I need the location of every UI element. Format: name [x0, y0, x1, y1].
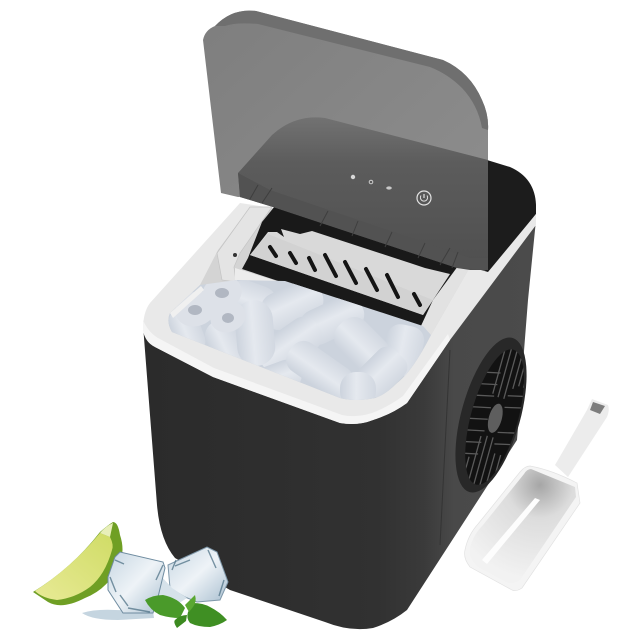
basil leaf top [185, 595, 196, 612]
basil leaves [145, 595, 227, 628]
power button [417, 191, 431, 205]
scoop handle [555, 399, 609, 477]
ice maker body [143, 160, 536, 629]
lime wedge [33, 522, 122, 605]
open lid [203, 11, 488, 270]
ring cubes [178, 280, 242, 330]
white top rim [143, 203, 536, 424]
lime rind [33, 522, 122, 605]
hinge bracket left [217, 207, 272, 282]
ice cube left [108, 552, 165, 613]
rim front highlight [143, 320, 450, 424]
basil leaf left [145, 595, 185, 618]
plate slotted face [250, 234, 433, 315]
small ledge right [385, 318, 431, 345]
bin well [168, 207, 470, 400]
panel lower band [238, 173, 488, 270]
ejector plate [250, 229, 450, 315]
bracket right [420, 266, 470, 335]
basil leaf bottom [174, 615, 187, 628]
bracket screw [233, 253, 237, 257]
lid top edge [215, 11, 488, 130]
ice bin interior [168, 206, 470, 400]
indicator icons [351, 175, 392, 190]
handle hole [590, 402, 605, 414]
lime pith [100, 523, 113, 537]
ice cube right [168, 547, 228, 602]
panel seam [440, 350, 450, 545]
scoop outer shell [465, 466, 580, 591]
tray corner lip [170, 286, 204, 318]
basil leaf right [187, 603, 227, 627]
ice cube facets [110, 550, 224, 612]
plate slots [270, 247, 420, 305]
ice bullets [168, 280, 431, 400]
fan vent [456, 338, 527, 492]
lid glass [203, 11, 488, 270]
fan hub [485, 402, 506, 434]
upper rear housing [470, 160, 536, 276]
dark mechanism [242, 206, 458, 329]
body shell [143, 220, 536, 629]
ice cubes [82, 547, 228, 620]
scoop inner [470, 469, 576, 583]
control panel seen through lid [238, 117, 488, 270]
scoop [465, 399, 609, 591]
water puddle [82, 610, 154, 620]
scoop highlight [482, 498, 540, 564]
fan grille [465, 349, 524, 485]
lime flesh [35, 533, 113, 600]
ledge left [235, 268, 283, 292]
capsule cubes [170, 280, 423, 400]
ice cube middle [155, 575, 187, 605]
lid hinge lines [250, 185, 458, 268]
